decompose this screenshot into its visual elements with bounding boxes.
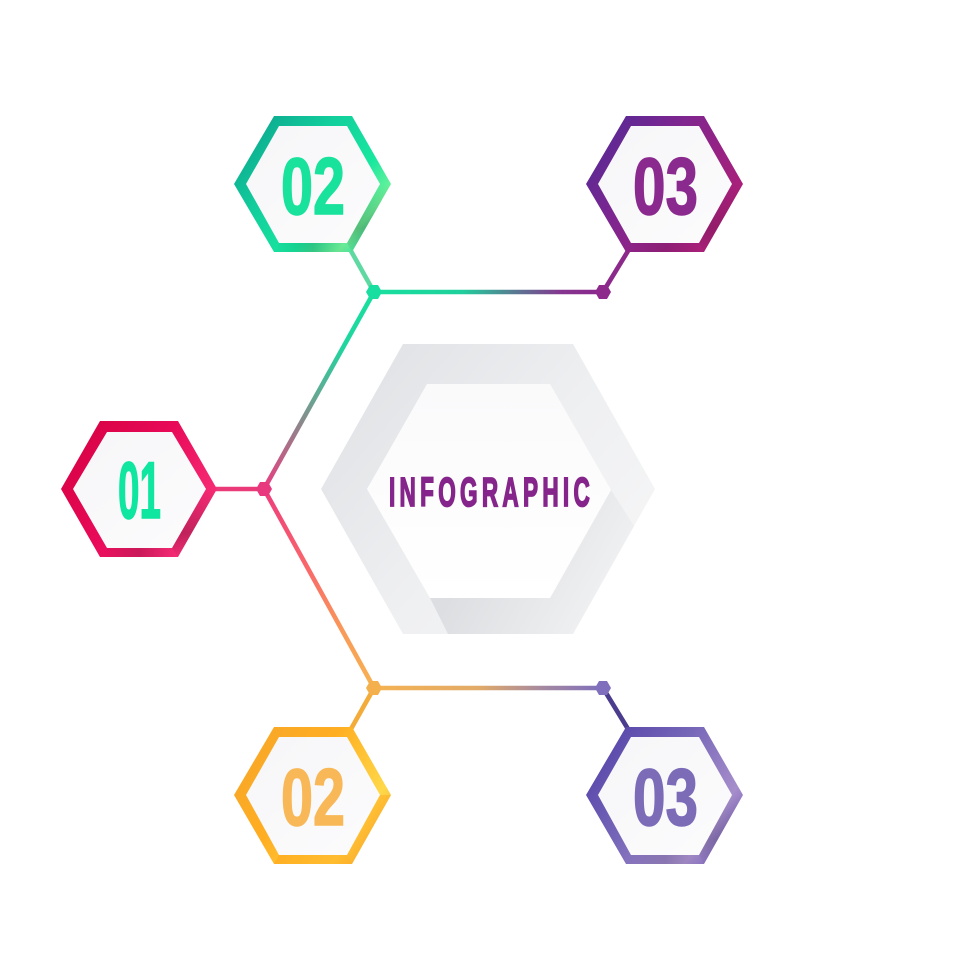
hexagon face [245, 125, 381, 244]
number 03: 03 [633, 142, 698, 232]
panel: hexagon 01: 01 [118, 446, 161, 536]
hexagon face [245, 736, 381, 855]
node: upper left [366, 285, 382, 299]
line: junction to lower branch [264, 489, 374, 688]
panel: hexagon 02 bottom [234, 727, 391, 864]
node: upper right [595, 285, 611, 299]
line: hexagon 01 to junction [215, 487, 264, 491]
hexagon frame [61, 421, 217, 557]
panel: hexagon 01 [61, 421, 217, 557]
node: lower left [366, 681, 382, 695]
line: upper branch to hexagon 03 [603, 251, 628, 292]
central hexagon inner shadow [430, 490, 634, 634]
panel: hexagon 03 top [586, 116, 743, 252]
line: lower branch horizontal [374, 686, 603, 690]
number 03: 03 [633, 753, 698, 843]
hexagon frame [586, 727, 743, 864]
panel: central hexagon [321, 344, 655, 634]
line: lower branch to hexagon 03 [603, 688, 628, 729]
hexagon frame [234, 116, 391, 252]
number 02: 02 [281, 142, 345, 232]
line: upper branch horizontal [374, 290, 603, 294]
connector nodes [256, 285, 611, 695]
hexagon face [71, 430, 207, 549]
line: junction to upper branch [264, 292, 374, 489]
heading: INFOGRAPHIC: INFOGRAPHIC [389, 470, 590, 516]
line: upper branch to hexagon 02 [351, 251, 374, 292]
number 02: 02 [281, 753, 345, 843]
hexagon frame [234, 727, 391, 864]
panel: hexagon 02 top [234, 116, 391, 252]
line: lower branch to hexagon 02 [351, 688, 374, 729]
hexagon frame [586, 116, 743, 252]
connector lines [215, 251, 628, 729]
node: lower right [595, 681, 611, 695]
central hexagon face [367, 384, 611, 598]
hexagon face [597, 736, 733, 855]
panel: hexagon 03 bottom [586, 727, 743, 864]
node: left junction [256, 482, 272, 496]
central hexagon outer ring [321, 344, 655, 634]
hexagon face [597, 125, 733, 244]
